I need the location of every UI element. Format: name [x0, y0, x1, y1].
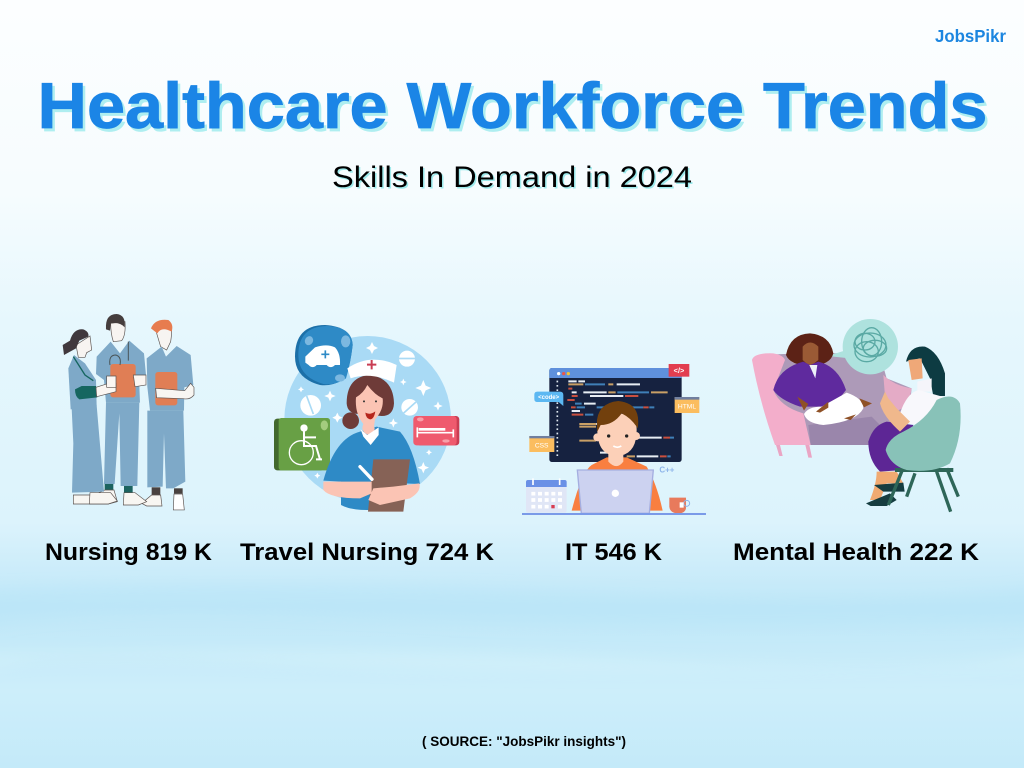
right nurse [142, 320, 194, 510]
ambulance bubble [295, 325, 353, 385]
logo: JobsPikr: JobsPikr [935, 26, 1006, 46]
left nurse [63, 329, 117, 504]
label: Nursing: Nursing 819 K [45, 539, 212, 566]
label: Mental Health: Mental Health 222 K [733, 539, 979, 566]
tag: closing tag [669, 364, 689, 377]
code window [549, 368, 682, 462]
title: Healthcare Workforce Trends [40, 72, 990, 145]
tag: CSS: CSS [535, 442, 549, 449]
pills and sparkles [298, 342, 443, 479]
icon: therapy session [752, 319, 961, 512]
icon: nursing team [63, 314, 194, 510]
nurse figure [323, 360, 420, 512]
developer [572, 401, 663, 511]
thought bubble [827, 319, 898, 374]
icon: IT developer [522, 364, 706, 515]
subtitle: Skills In Demand in 2024 [334, 162, 694, 196]
desk line [522, 513, 706, 515]
therapist [866, 347, 945, 506]
backdrop circle [284, 336, 451, 503]
subtitle: Skills In Demand in 2024 [332, 161, 692, 194]
sofa [752, 353, 912, 458]
calendar [526, 478, 567, 513]
armchair [886, 397, 961, 512]
label: IT: IT 546 K [565, 539, 662, 566]
tag: HTML: HTML [678, 403, 696, 410]
mug [669, 498, 690, 513]
icon: travel nurse [274, 325, 459, 512]
middle nurse [90, 314, 147, 505]
source note: ( SOURCE: "JobsPikr insights") [422, 734, 626, 749]
client [773, 333, 872, 425]
tag: C++: C++ [659, 465, 675, 474]
tag: closing tag: </> [674, 366, 684, 375]
title: Healthcare Workforce Trends [38, 69, 988, 142]
tag: HTML [675, 397, 699, 413]
tag: code [534, 392, 563, 406]
tag: CSS [529, 436, 554, 452]
label: Travel Nursing: Travel Nursing 724 K [240, 539, 494, 566]
wheelchair card [274, 418, 330, 470]
tag: code: <code> [538, 395, 560, 401]
laptop [577, 470, 653, 513]
bed card [413, 416, 459, 445]
